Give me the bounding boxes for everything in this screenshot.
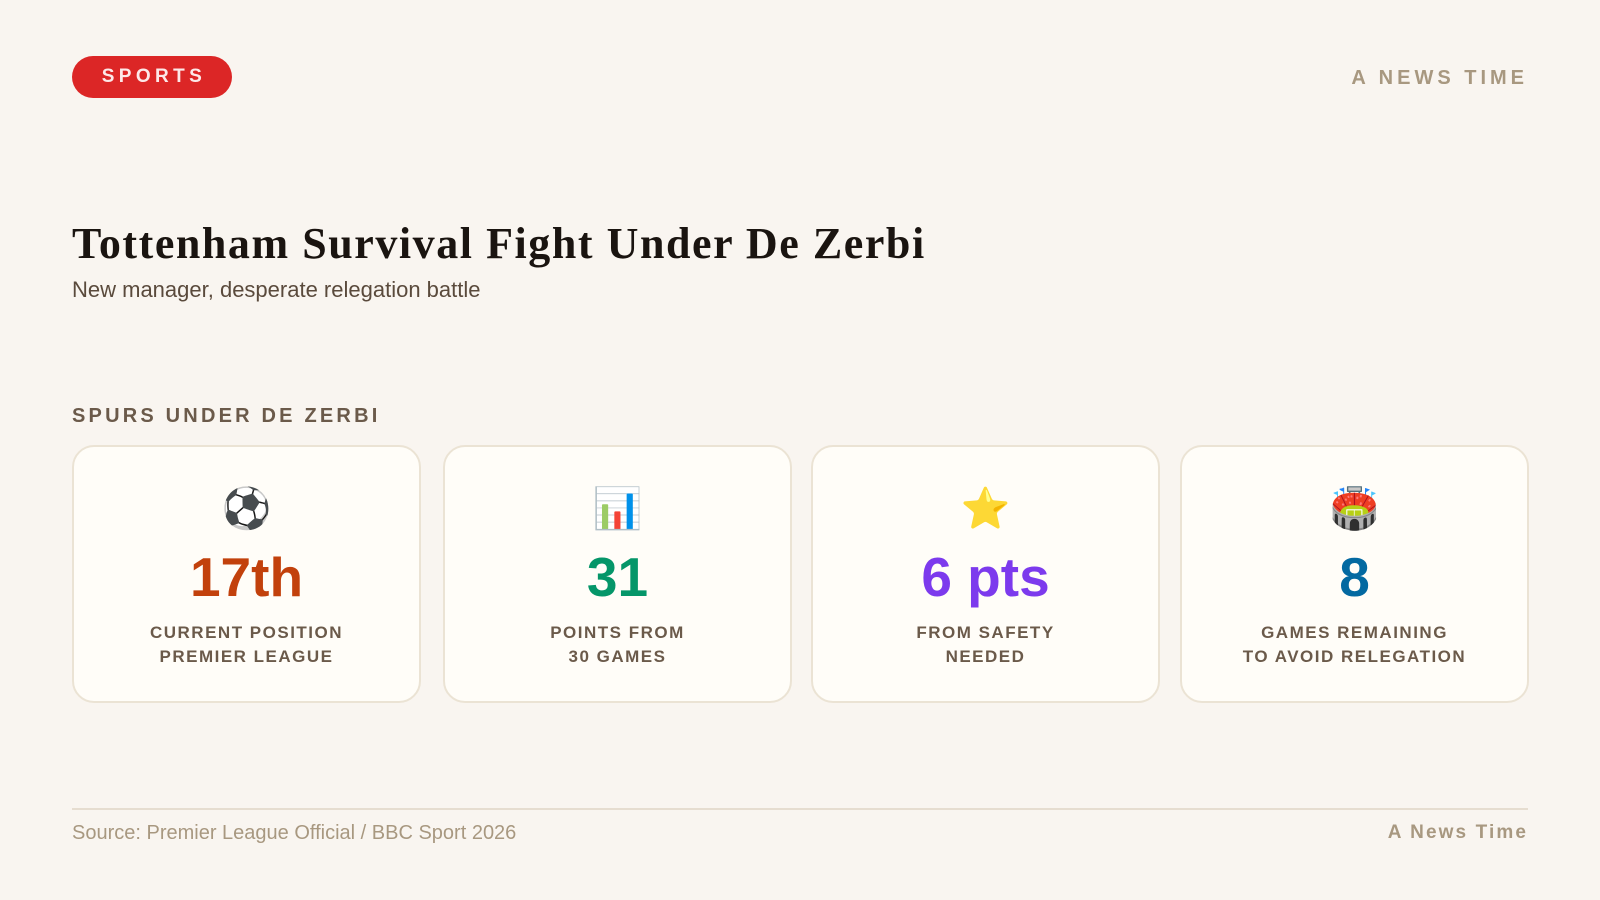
number: 17th: [190, 546, 303, 608]
label: 30 GAMES: [568, 647, 666, 666]
footer brand: A News Time: [1388, 822, 1528, 843]
label: [150, 623, 343, 666]
title: Tottenham Survival Fight Under De Zerbi: [72, 219, 926, 268]
number: 8: [1339, 546, 1370, 608]
category pill: [72, 56, 232, 98]
number: 31: [587, 546, 648, 608]
label: FROM SAFETY: [916, 623, 1055, 642]
icon: stadium: 🏟️: [1330, 485, 1379, 532]
section label: SPURS UNDER DE ZERBI: [72, 405, 380, 427]
number: 6 pts: [921, 546, 1050, 608]
label: [1242, 623, 1466, 666]
label: POINTS FROM: [550, 623, 685, 642]
icon: soccer ball: ⚽: [222, 485, 271, 532]
label: PREMIER LEAGUE: [159, 647, 334, 666]
category pill: SPORTS: [102, 66, 206, 87]
card: position: [72, 445, 421, 703]
icon: star: ⭐: [961, 485, 1010, 532]
label: TO AVOID RELEGATION: [1243, 647, 1466, 666]
label: GAMES REMAINING: [1261, 623, 1448, 642]
source: Source: Premier League Official / BBC Sport 2026: [72, 822, 516, 844]
card: points: [443, 445, 792, 703]
icon: bar chart: 📊: [593, 485, 642, 532]
label: [550, 623, 685, 666]
label: NEEDED: [946, 647, 1025, 666]
card: games: [1180, 445, 1529, 703]
brand header: A NEWS TIME: [1351, 67, 1528, 89]
label: CURRENT POSITION: [150, 623, 343, 642]
card: safety: [811, 445, 1160, 703]
label: [916, 623, 1055, 666]
subtitle: New manager, desperate relegation battle: [72, 277, 480, 302]
